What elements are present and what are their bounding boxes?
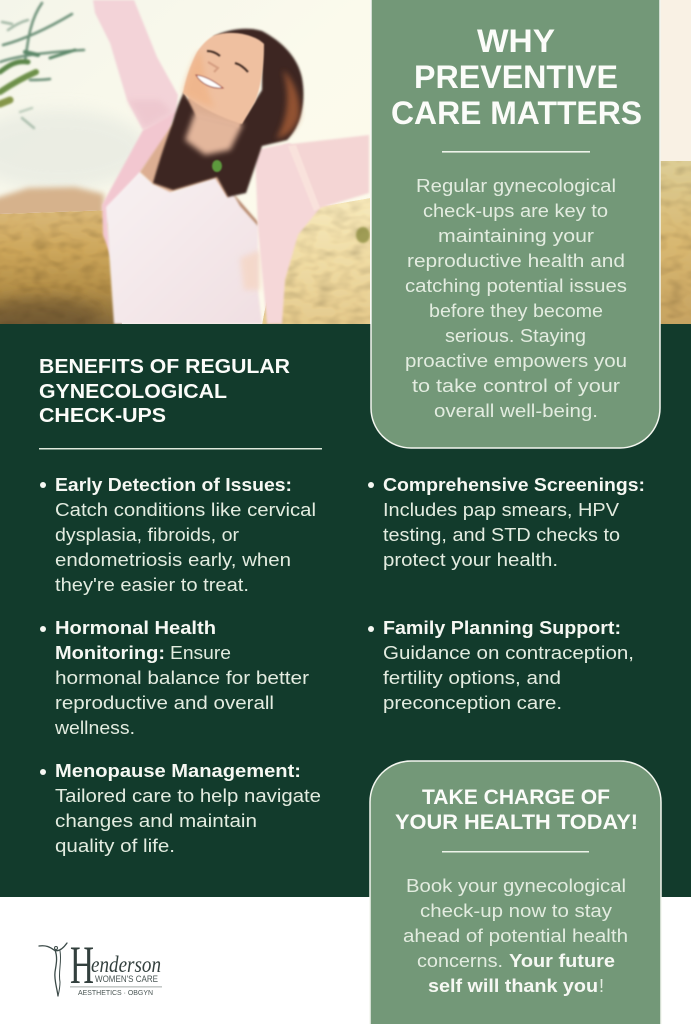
jacket left side [102,112,176,262]
right photo strip [660,0,691,324]
hair [153,29,303,197]
bullet: hormonal health monitoring: reproductive and overall [55,693,274,713]
heading: why preventive care matters [391,23,642,131]
bullet: family planning support: fertility options, and [383,668,561,688]
photo: woman in a golden field [0,0,370,338]
heading: benefits of regular check-ups: BENEFITS OF REGULAR [39,355,290,378]
heading: take charge of your health today [395,786,638,834]
call to action paragraph: Book your gynecological [406,876,626,896]
bullet: early detection of issues [40,475,316,595]
bullet: hormonal health monitoring [40,618,309,738]
pendant [212,160,222,172]
logo: henderson women's care [39,935,162,997]
bullet: menopause management: Menopause Management: [55,761,301,781]
bullet: family planning support: Family Planning Support: [383,618,621,638]
background distant trees [0,184,106,214]
right arm [283,135,369,208]
lining and skin at right of shirt [233,195,258,226]
call to action paragraph: ! [599,976,604,996]
logo: henderson women's care: AESTHETICS · OBGYN [78,988,153,997]
tree branch leaves [0,3,84,128]
icon: raised arms figure [39,943,67,996]
intro paragraph: reproductive health and [407,251,625,271]
bullet: hormonal health monitoring: Hormonal Health [55,618,216,638]
heading: benefits of regular check-ups: CHECK-UPS [39,404,166,427]
intro paragraph: catching potential issues [405,276,627,296]
call to action paragraph: concerns. [417,951,503,971]
intro paragraph: proactive empowers you [405,351,627,371]
intro paragraph: serious. Staying [445,326,586,346]
bullet: hormonal health monitoring: wellness. [54,718,135,738]
heading: take charge of your health today: YOUR HEALTH TODAY! [395,811,638,834]
intro paragraph: overall well-being. [434,401,598,421]
raised arm [93,0,178,130]
bullet: family planning support: Guidance on contraception, [383,643,634,663]
bullet: comprehensive screenings: Comprehensive Screenings: [383,475,645,495]
heading: why preventive care matters: CARE MATTERS [391,95,642,131]
bullet: early detection of issues: Early Detection of Issues: [55,475,292,495]
jacket right front [255,143,320,324]
bullet: menopause management [40,761,321,856]
right grass [262,198,370,324]
call to action paragraph: Your future [509,951,615,971]
face [183,33,264,124]
bullet: early detection of issues: dysplasia, fibroids, or [55,525,239,545]
left grass [0,210,122,324]
skin neck and chest [140,97,242,198]
intro paragraph [405,176,627,421]
dark green band [0,324,691,897]
bullet: comprehensive screenings: testing, and STD checks to [383,525,620,545]
heading: benefits of regular check-ups: GYNECOLOGICAL [39,380,227,403]
bullet: comprehensive screenings: Includes pap smears, HPV [383,500,619,520]
nose shadow [208,62,218,72]
bullet: early detection of issues: they're easier to treat. [55,575,249,595]
intro paragraph: check-ups are key to [423,201,608,221]
bullet: menopause management: Tailored care to help navigate [55,786,321,806]
heading: why preventive care matters: WHY [477,23,555,59]
bullet: menopause management: changes and maintain [55,811,257,831]
heading: take charge of your health today: TAKE CHARGE OF [422,786,610,809]
neck skin over hair [185,112,243,155]
bullet: family planning support [368,618,634,713]
panel: why preventive care matters [371,0,660,448]
bullet: early detection of issues: endometriosis early, when [55,550,291,570]
intro paragraph: Regular gynecological [416,176,616,196]
bullet: hormonal health monitoring: hormonal balance for better [55,668,309,688]
heading: benefits of regular check-ups [39,355,290,427]
logo: henderson women's care: WOMEN'S CARE [95,974,158,984]
heading: why preventive care matters: PREVENTIVE [414,59,618,95]
intro paragraph: before they become [429,301,603,321]
bullet: family planning support: preconception care. [383,693,562,713]
bullet: comprehensive screenings: protect your health. [383,550,558,570]
call to action paragraph [403,876,628,996]
bullet: comprehensive screenings [368,475,645,570]
call to action paragraph: check-up now to stay [420,901,612,921]
smile [196,75,223,88]
bullet: menopause management: quality of life. [55,836,175,856]
call to action paragraph: self will thank you [428,976,598,996]
intro paragraph: to take control of your [412,376,620,396]
eyes [207,51,248,72]
intro paragraph: maintaining your [438,226,594,246]
panel: take charge call to action [370,761,661,1024]
white top [106,172,262,324]
logo: henderson women's care: H [70,935,94,995]
bullet: hormonal health monitoring: Ensure [170,643,231,663]
bullet: early detection of issues: Catch conditions like cervical [55,500,316,520]
call to action paragraph: ahead of potential health [403,926,628,946]
logo: henderson women's care: enderson [91,952,161,977]
bullet: hormonal health monitoring: Monitoring: [55,643,165,663]
